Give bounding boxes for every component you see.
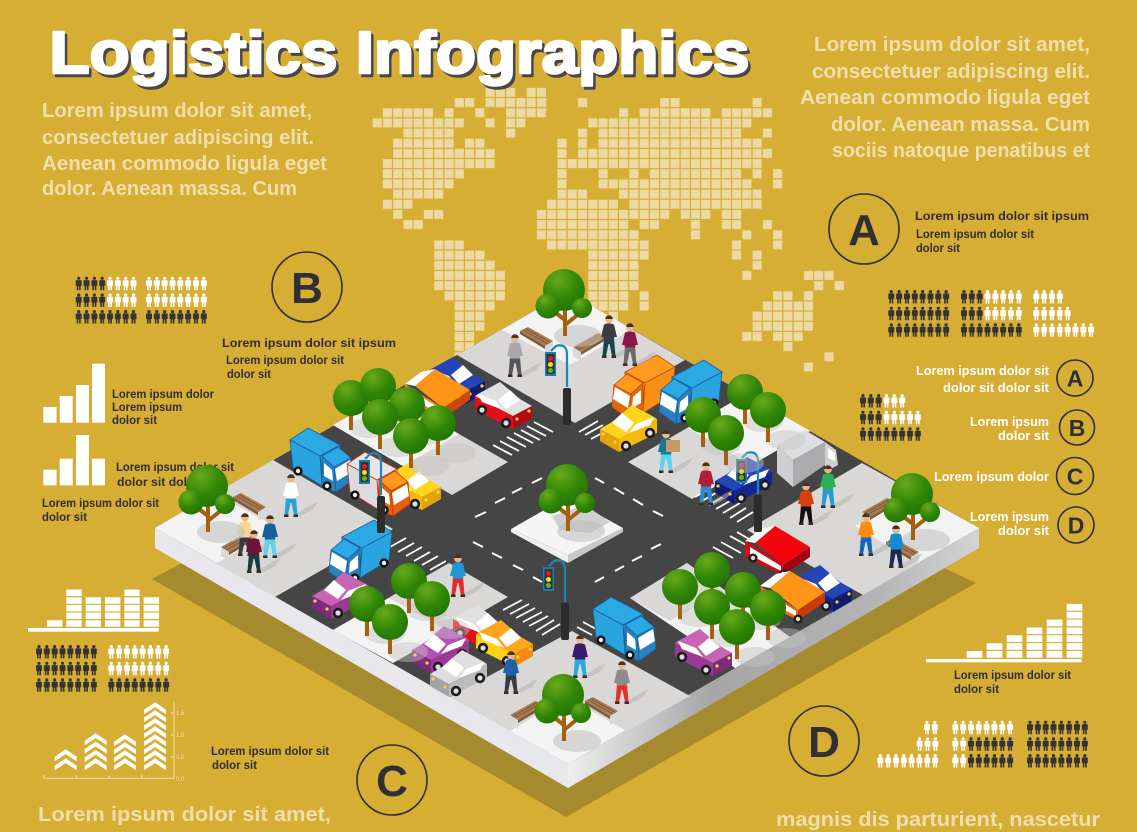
text: section A caption: Lorem ipsum dolor sit ipsum <box>915 209 1089 223</box>
badge A large: A <box>848 206 880 255</box>
block: right tree strip <box>628 394 810 499</box>
text: lower right bar chart caption: dolor sit <box>954 682 999 696</box>
truck: blue left <box>290 428 353 492</box>
truck: white with orange cab <box>347 452 410 516</box>
lower right street vehicles <box>745 526 852 624</box>
text block: right paragraph: Lorem ipsum dolor sit amet, <box>814 34 1090 56</box>
round trees: lower right strip <box>662 552 806 667</box>
badge C large <box>357 745 427 815</box>
truck: blue bottom <box>593 597 656 661</box>
text: legend labels: Lorem ipsum dolor sit <box>916 364 1050 378</box>
van: orange lower <box>760 571 825 624</box>
segmented bar chart right <box>926 604 1082 662</box>
legend badge A small <box>1057 360 1093 396</box>
text block: bottom left sentence: Lorem ipsum dolor sit amet, <box>38 804 331 826</box>
pictogram: people lower right <box>877 721 1088 768</box>
platform left side face <box>155 528 568 788</box>
text: legend labels: Lorem ipsum dolor <box>934 470 1049 484</box>
crosswalks <box>390 421 754 635</box>
lower left parked cars <box>412 605 533 697</box>
text: chevron chart caption <box>211 744 329 772</box>
round trees: left strip <box>333 368 476 476</box>
car: purple left <box>312 572 369 619</box>
block: top pavement <box>457 292 685 423</box>
car: purple lower <box>412 626 469 673</box>
legend badge B small <box>1060 410 1094 445</box>
van: orange <box>405 369 470 422</box>
text: legend labels: Lorem ipsum <box>970 510 1049 524</box>
text: bar chart one caption: Lorem ipsum dolor <box>112 387 214 401</box>
chevron chart with axis: 0,0 <box>176 777 185 783</box>
truck: blue <box>659 360 722 424</box>
title: Logistics Infographics <box>50 19 750 86</box>
chevron chart with axis: 1,5 <box>176 711 185 717</box>
world map made of square pixels <box>372 87 844 372</box>
truck: grey <box>777 430 838 487</box>
text: bar chart two caption: dolor sit <box>42 510 87 524</box>
text: bar chart two caption: Lorem ipsum dolor sit <box>42 496 159 510</box>
text: legend labels: dolor sit dolor sit <box>943 381 1050 395</box>
truck: orange <box>612 355 675 419</box>
legend badge B small: B <box>1069 415 1085 441</box>
isometric city platform <box>152 269 979 817</box>
text block: left paragraph: dolor. Aenean massa. Cum <box>42 178 297 200</box>
chevron chart with axis: 1,0 <box>176 733 185 739</box>
round trees: lower left strip <box>349 563 470 662</box>
badge B large <box>272 252 342 322</box>
pictogram: people top left <box>76 277 207 324</box>
text block: left paragraph: Lorem ipsum dolor sit amet, <box>42 100 312 122</box>
segmented bar chart left <box>28 590 159 632</box>
text: chevron chart caption: Lorem ipsum dolor sit <box>211 744 329 758</box>
top street vehicles <box>405 355 722 452</box>
badge D large: D <box>808 718 840 767</box>
text block: right paragraph: Aenean commodo ligula eget <box>800 87 1090 109</box>
legend badge C small: C <box>1067 464 1083 490</box>
truck: blue lower left <box>329 520 392 584</box>
text: bar chart two caption <box>42 460 234 524</box>
text: lower right bar chart caption: Lorem ipsum dolor sit <box>954 668 1071 682</box>
people <box>237 315 923 704</box>
text: legend labels: Lorem ipsum <box>970 415 1049 429</box>
pictogram: people middle right <box>860 394 921 441</box>
car: red <box>475 382 532 429</box>
text: section B caption: Lorem ipsum dolor sit ipsum <box>222 336 396 350</box>
text: chevron chart caption: dolor sit <box>212 758 257 772</box>
car: silver <box>430 650 487 697</box>
badge C large: C <box>376 757 408 806</box>
block: right pavement <box>747 463 979 595</box>
block: left pavement <box>155 460 393 597</box>
text: legend labels: dolor sit <box>998 429 1050 443</box>
parcel box carried by courier <box>666 440 680 452</box>
road surface <box>155 292 979 764</box>
legend badge C small <box>1056 458 1094 494</box>
badge D large <box>789 706 859 776</box>
right street vehicles <box>715 430 838 504</box>
van: red <box>745 526 810 578</box>
central island <box>511 497 623 563</box>
text: section A caption: dolor sit <box>916 241 960 255</box>
text: bar chart one caption: dolor sit <box>112 413 157 427</box>
car: blue parked <box>428 357 485 404</box>
text block: left paragraph: Aenean commodo ligula eget <box>42 153 327 175</box>
benches <box>221 327 919 729</box>
block: lower left tree strip <box>333 563 508 663</box>
title: Logistics Infographics <box>52 22 752 89</box>
text block: right paragraph: consectetuer adipiscing elit. <box>812 61 1090 83</box>
text: bar chart one caption <box>112 387 214 427</box>
text block: right paragraph: dolor. Aenean massa. Cum <box>831 114 1090 136</box>
car: yellow left <box>384 463 441 510</box>
pictogram: people lower left <box>36 645 169 692</box>
platform right side face <box>568 528 979 788</box>
left street vehicles <box>290 428 441 619</box>
car: navy parked <box>795 565 852 612</box>
block: left tree strip <box>333 394 508 495</box>
block: lower right tree strip <box>630 563 790 668</box>
pictogram: people top right <box>888 290 1094 337</box>
legend badge D small: D <box>1068 512 1084 538</box>
traffic lights <box>359 345 762 640</box>
text: bar chart two caption: Lorem ipsum dolor sit <box>116 460 234 474</box>
car: yellow <box>600 405 657 452</box>
text block: right paragraph: sociis natoque penatibus et <box>832 140 1090 162</box>
bar chart one <box>43 364 105 423</box>
text: legend labels: dolor sit <box>998 524 1050 538</box>
text block: left paragraph <box>42 100 327 200</box>
road dashes <box>473 478 663 582</box>
car: navy <box>715 457 772 504</box>
large trees <box>178 269 950 752</box>
block: bottom pavement <box>450 631 690 764</box>
bar chart two <box>43 435 105 485</box>
platform shadow <box>152 500 976 817</box>
text: bar chart one caption: Lorem ipsum <box>112 400 182 414</box>
car: red lower <box>453 605 510 652</box>
text block: left paragraph: consectetuer adipiscing elit. <box>42 127 314 149</box>
round trees: right strip <box>685 374 806 473</box>
legend badge D small <box>1058 507 1094 543</box>
text block: bottom right sentence: magnis dis parturient, nascetur <box>776 809 1100 831</box>
text: section B caption: dolor sit <box>227 367 271 381</box>
badge B large: B <box>291 264 323 313</box>
text: bar chart two caption: dolor sit dolor sit <box>117 475 217 489</box>
text block: right paragraph <box>800 34 1090 162</box>
text: section B caption: Lorem ipsum dolor sit <box>226 353 344 367</box>
text: section A caption <box>915 209 1089 255</box>
bottom street vehicles <box>593 597 732 676</box>
text: section B caption <box>222 336 396 381</box>
badge A large <box>829 194 899 264</box>
car: purple bottom <box>675 629 732 676</box>
chevron chart with axis: 0,5 <box>176 755 185 761</box>
legend badge A small: A <box>1067 366 1083 392</box>
text: legend labels <box>916 364 1050 538</box>
text: section A caption: Lorem ipsum dolor sit <box>916 227 1034 241</box>
car: yellow orange <box>476 620 533 667</box>
chevron chart with axis <box>44 702 185 783</box>
text: lower right bar chart caption <box>954 668 1071 696</box>
